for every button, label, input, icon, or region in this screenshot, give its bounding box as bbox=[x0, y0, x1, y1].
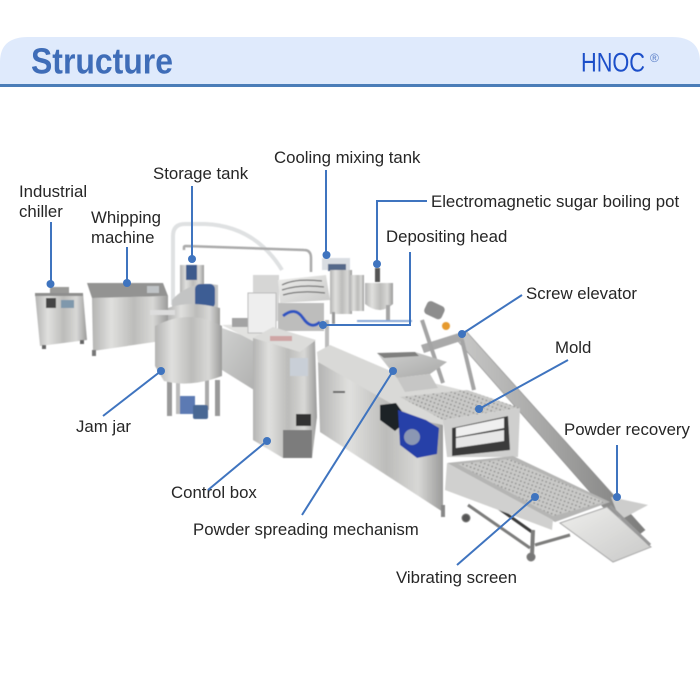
callout: vibrating screen bbox=[396, 493, 539, 587]
callout: vibrating screen: Vibrating screen bbox=[396, 568, 517, 587]
pipes bbox=[173, 224, 311, 305]
machine: industrial chiller bbox=[35, 287, 87, 349]
callout: industrial chiller: chiller bbox=[19, 202, 63, 221]
callout: storage tank bbox=[153, 164, 249, 263]
machine: powder spreading hopper bbox=[377, 352, 447, 392]
callout: electromagnetic sugar boiling pot bbox=[373, 192, 679, 268]
callout: industrial chiller: Industrial bbox=[19, 182, 87, 201]
callout: depositing head bbox=[319, 227, 507, 329]
machine: blue gearbox bbox=[380, 403, 439, 458]
brand logo: HNOC bbox=[581, 48, 645, 78]
callout: control box: Control box bbox=[171, 483, 257, 502]
callout: storage tank: Storage tank bbox=[153, 164, 249, 183]
callout: powder recovery: Powder recovery bbox=[564, 420, 691, 439]
machine: mold bbox=[400, 390, 520, 457]
machine: cooling mixing tank bbox=[322, 258, 364, 324]
callout: jam jar: Jam jar bbox=[76, 417, 131, 436]
machine: control box bbox=[253, 327, 317, 458]
callout: screw elevator: Screw elevator bbox=[526, 284, 637, 303]
machine: main body bbox=[317, 345, 470, 517]
title: Structure bbox=[31, 40, 173, 82]
callout: cooling mixing tank bbox=[274, 148, 421, 259]
callout: whipping machine: machine bbox=[91, 228, 154, 247]
callout: powder spreading mechanism bbox=[193, 367, 419, 539]
brand logo: ® bbox=[650, 51, 659, 65]
production line illustration bbox=[35, 224, 651, 562]
machine: screw elevator bbox=[421, 300, 645, 540]
callout: whipping machine bbox=[91, 208, 161, 287]
callout: cooling mixing tank: Cooling mixing tank bbox=[274, 148, 421, 167]
machine: vibrating screen bbox=[445, 456, 610, 530]
callout: whipping machine: Whipping bbox=[91, 208, 161, 227]
callout: industrial chiller bbox=[19, 182, 87, 288]
callout: powder recovery bbox=[564, 420, 691, 501]
conveyor counter bbox=[222, 318, 300, 400]
machine: depositing head bbox=[248, 275, 330, 352]
callout: depositing head: Depositing head bbox=[386, 227, 507, 246]
callout: powder spreading mechanism: Powder spreading mechanism bbox=[193, 520, 419, 539]
machine: powder recovery bbox=[560, 497, 651, 562]
callout: control box bbox=[171, 437, 271, 502]
machine: whipping machine bbox=[87, 283, 168, 356]
machine: storage tank bbox=[172, 265, 218, 312]
machine: frame bbox=[462, 488, 570, 561]
header band bbox=[0, 37, 700, 87]
callout: jam jar bbox=[76, 367, 165, 436]
machine: jam jar bbox=[150, 304, 222, 419]
callout: electromagnetic sugar boiling pot: Electromagnetic sugar boiling pot bbox=[431, 192, 679, 211]
callout: mold: Mold bbox=[555, 338, 591, 357]
callout: screw elevator bbox=[458, 284, 637, 338]
machine: electromagnetic sugar boiling pot bbox=[357, 268, 412, 322]
callout: mold bbox=[475, 338, 591, 413]
